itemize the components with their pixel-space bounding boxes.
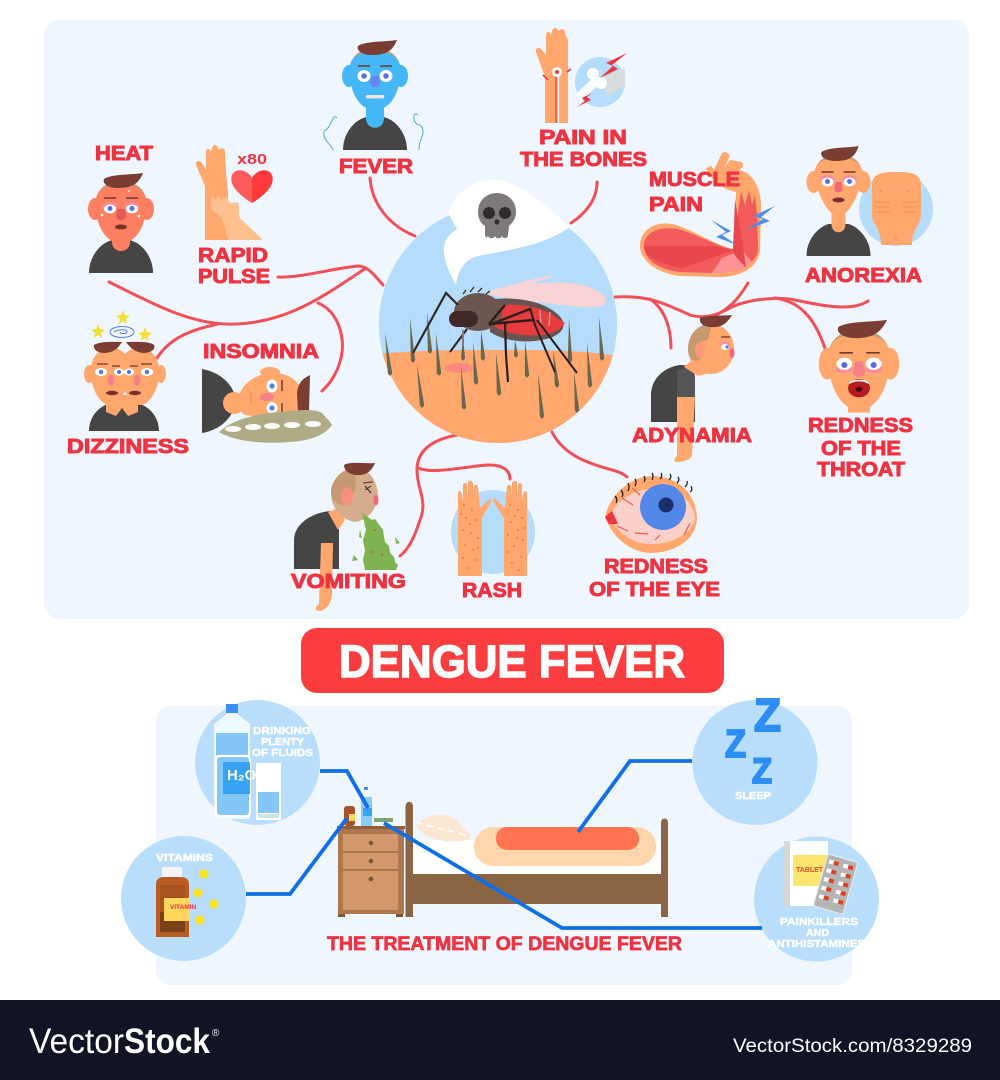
label: rash: RASH <box>462 580 522 602</box>
label: muscle pain: MUSCLE <box>649 169 740 191</box>
footer bar <box>0 1000 1000 1080</box>
icon: skull <box>478 193 516 238</box>
label: vitamins: VITAMINS <box>156 853 213 864</box>
symptom: redness of the eye <box>589 473 720 601</box>
label: fever: FEVER <box>339 156 414 178</box>
label: the treatment of dengue fever: THE TREATMENT OF DENGUE FEVER <box>327 934 682 955</box>
bubble: white poison cloud <box>444 180 570 285</box>
footer logo: Vector <box>29 1022 124 1061</box>
footer logo bold: Stock <box>124 1022 210 1061</box>
icon: blue shivering man <box>342 40 408 150</box>
label: redness of the eye: OF THE EYE <box>589 579 720 601</box>
label: redness of the eye <box>589 556 720 601</box>
symptom: insomnia <box>202 341 332 443</box>
label: drinking plenty of fluids: DRINKING <box>253 726 311 737</box>
central illustration: mosquito on skin <box>375 180 620 450</box>
title banner: DENGUE FEVER <box>339 636 685 687</box>
label: painkillers and antihistamines: PAINKILLERS <box>780 917 858 928</box>
icon: bloodshot eye <box>605 473 697 553</box>
label: x80: x80 <box>237 151 267 168</box>
label: pain in the bones: THE BONES <box>520 149 647 171</box>
symptom: redness of the throat <box>808 320 913 481</box>
label: redness of the throat: OF THE <box>821 438 901 460</box>
label: redness of the eye: REDNESS <box>604 556 708 578</box>
symptom: rapid pulse <box>196 145 273 288</box>
icon: vitamin bottle: VITAMIN <box>170 904 197 911</box>
label: redness of the throat: THROAT <box>817 459 905 481</box>
icon: bone circle <box>575 53 627 107</box>
bite spot <box>445 363 473 373</box>
label: drinking plenty of fluids: OF FLUIDS <box>252 748 313 759</box>
symptom: dizziness <box>67 310 189 458</box>
skin hairs <box>385 312 604 418</box>
symptom: muscle pain <box>640 152 775 277</box>
icon: slumped man <box>651 315 734 462</box>
icon: man awake on pillow <box>202 367 332 443</box>
label: redness of the throat <box>808 415 913 481</box>
icon: sleep Z letters: Z <box>725 723 746 766</box>
label: rapid pulse: RAPID <box>198 245 268 267</box>
icon: blister pack <box>813 854 858 914</box>
icon: stars and spiral <box>91 310 152 341</box>
symptom: fever <box>324 40 423 178</box>
label: muscle pain <box>649 169 740 216</box>
label: muscle pain: PAIN <box>649 194 703 216</box>
treatment circle: sleep <box>692 689 818 825</box>
icon: bed <box>406 802 668 917</box>
symptom: pain in the bones <box>520 28 647 171</box>
label: redness of the throat: REDNESS <box>808 415 913 437</box>
icon: vomiting man <box>294 463 378 611</box>
treatment connector lines <box>246 761 762 928</box>
symptom: adynamia <box>632 315 752 462</box>
title banner <box>301 628 724 693</box>
icon: man with open mouth <box>819 320 899 413</box>
icon: sleep Z letters <box>725 689 781 791</box>
label: vomiting: VOMITING <box>291 571 406 593</box>
label: rapid pulse <box>198 245 270 288</box>
label: rapid pulse: PULSE <box>198 266 270 288</box>
symptom connector lines <box>109 178 868 556</box>
treatment circle: vitamins <box>121 836 246 961</box>
symptom: vomiting <box>291 463 406 611</box>
label: painkillers and antihistamines: AND <box>806 928 829 939</box>
icon: sleep Z letters: Z <box>752 752 772 791</box>
icon: nightstand with medicines <box>337 787 405 917</box>
registered mark: ® <box>212 1028 220 1039</box>
icon: tablets box: TABLETS <box>796 867 828 874</box>
icon: glass of water <box>256 763 281 820</box>
panel: symptoms <box>44 20 969 619</box>
icon: sleep Z letters: Z <box>754 689 781 741</box>
icon: heart <box>231 170 273 203</box>
treatment circle: painkillers and antihistamines <box>754 836 879 962</box>
label: painkillers and antihistamines: ANTIHISTAMINES <box>768 939 865 950</box>
label: adynamia: ADYNAMIA <box>632 425 752 447</box>
icon: hands with rash <box>451 481 535 576</box>
symptom: rash <box>451 481 535 602</box>
icon: yellow pills <box>194 870 218 924</box>
footer image id: VectorStock.com/8329289 <box>733 1036 972 1057</box>
label: heat: HEAT <box>95 143 153 165</box>
icon: shiver lines <box>324 114 423 150</box>
icon: thin man <box>806 146 870 256</box>
label: dizziness: DIZZINESS <box>67 436 189 458</box>
icon: hand with painful joints <box>536 28 571 123</box>
treatment circle: drinking fluids <box>195 700 320 825</box>
icon: wrist and pulse fingers <box>196 145 263 240</box>
label: anorexia: ANOREXIA <box>805 265 922 287</box>
panel: treatment <box>156 706 852 985</box>
symptom: anorexia <box>805 146 933 287</box>
icon: flushed man <box>88 173 154 273</box>
symptom: heat <box>88 143 154 273</box>
icon: torso circle <box>859 172 933 246</box>
label: painkillers and antihistamines <box>768 917 865 950</box>
icon: vomit <box>352 513 400 570</box>
label: insomnia: INSOMNIA <box>203 341 319 363</box>
icon: water bottle: H₂O <box>227 767 256 784</box>
icon: mosquito <box>413 275 606 382</box>
label: pain in the bones <box>520 127 647 171</box>
label: sleep: SLEEP <box>735 791 771 802</box>
label: pain in the bones: PAIN IN <box>539 127 627 149</box>
icon: double vision man <box>84 342 166 431</box>
icon: flexed arm muscles <box>640 152 775 277</box>
label: drinking plenty of fluids <box>252 726 313 759</box>
label: drinking plenty of fluids: PLENTY <box>261 737 304 748</box>
